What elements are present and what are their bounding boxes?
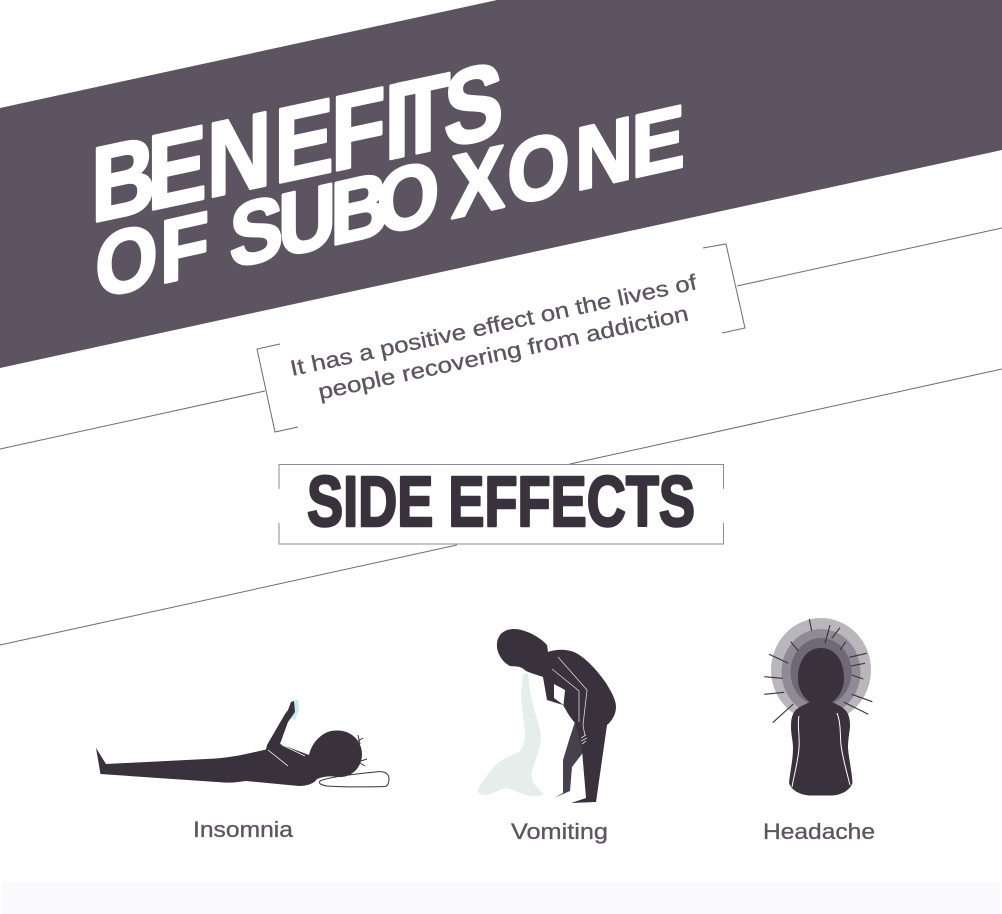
rear leg xyxy=(554,722,585,798)
label: insomnia: Insomnia xyxy=(193,817,294,842)
icon: insomnia person lying down xyxy=(96,700,389,787)
arm highlight xyxy=(268,745,305,766)
subtitle text xyxy=(288,269,700,404)
gap between arm and belly xyxy=(554,684,565,705)
halo middle xyxy=(782,629,860,715)
subtitle callout xyxy=(257,244,745,432)
pain lines xyxy=(764,619,872,723)
icon: headache person xyxy=(764,618,872,796)
halo outer xyxy=(771,618,871,722)
banner xyxy=(0,0,1002,368)
phone xyxy=(290,700,299,720)
vomit xyxy=(477,673,544,796)
arm highlight xyxy=(552,657,587,736)
body xyxy=(96,701,362,786)
title: OF SUBOXONE xyxy=(95,86,685,318)
label: vomiting: Vomiting xyxy=(511,819,608,844)
body highlights xyxy=(792,713,850,787)
hair lines xyxy=(358,735,367,766)
torso and head xyxy=(497,629,616,803)
body and head xyxy=(789,648,852,796)
halo inner xyxy=(790,638,852,706)
side effects heading: SIDE EFFECTS xyxy=(307,463,695,542)
pillow xyxy=(319,772,389,787)
hand xyxy=(581,735,587,744)
label: headache: Headache xyxy=(763,819,875,844)
icon: vomiting person xyxy=(477,629,616,803)
subtitle text: people recovering from addiction xyxy=(316,301,691,404)
footer strip xyxy=(2,882,1000,914)
title: BENEFITS xyxy=(91,39,503,245)
subtitle text: It has a positive effect on the lives of xyxy=(288,269,700,381)
